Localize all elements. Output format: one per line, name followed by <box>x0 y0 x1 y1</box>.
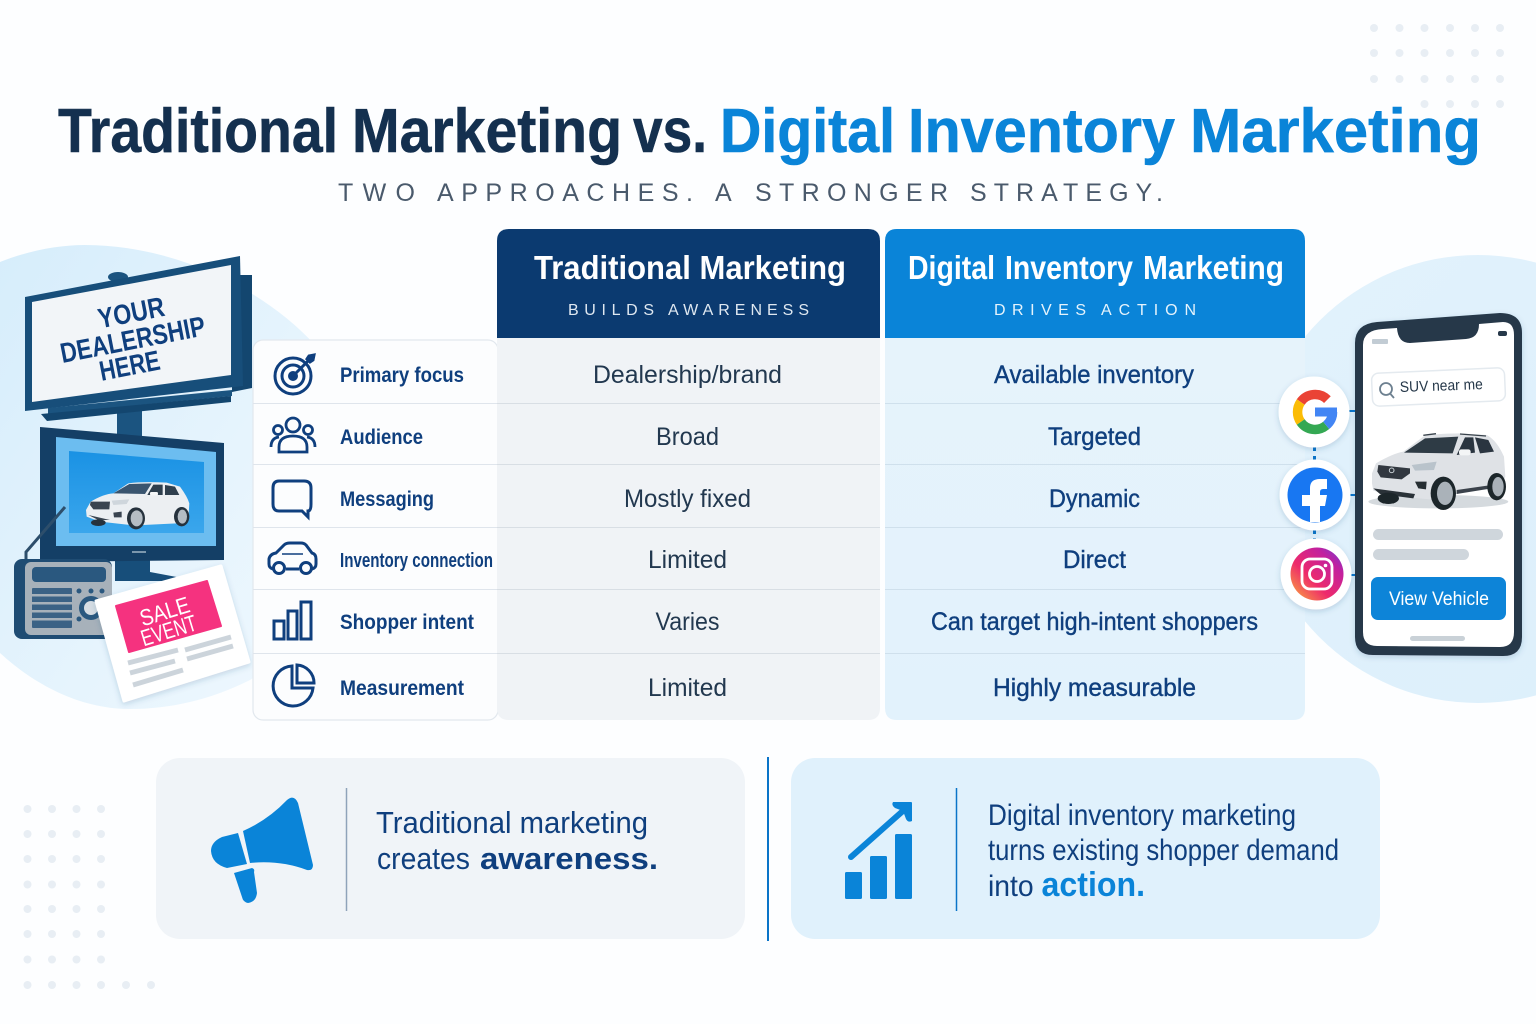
icon: growth chart <box>845 802 912 899</box>
digital column values: Direct <box>1063 546 1126 574</box>
column: digital inventory marketing: DRIVES <box>994 302 1086 319</box>
icon: Instagram <box>1280 538 1352 610</box>
table <box>253 229 1305 720</box>
sale event flyer: EVENT <box>138 610 200 651</box>
background blob: left illustration <box>0 245 315 709</box>
icon: Facebook <box>1280 460 1350 530</box>
billboard: HERE <box>97 345 163 387</box>
illustration: traditional media <box>14 256 252 701</box>
callout: traditional: creates <box>377 841 470 876</box>
SUV photo <box>1368 433 1508 510</box>
traditional column values: Dealership/brand <box>593 361 782 389</box>
panel: row labels <box>253 340 498 720</box>
radio <box>14 507 112 639</box>
subtitle: STRONGER <box>755 179 948 207</box>
callout: traditional <box>156 758 745 939</box>
dot pattern: top right <box>1370 24 1504 108</box>
label: inventory connection: Inventory connection <box>340 550 493 572</box>
billboard: DEALERSHIP <box>58 310 208 369</box>
callout: digital: turns existing shopper demand <box>988 834 1339 867</box>
icon: audience <box>271 418 315 452</box>
column: digital inventory marketing: Marketing <box>1143 249 1284 286</box>
traditional column values: Broad <box>656 423 719 451</box>
icon: bar chart <box>274 602 311 639</box>
column: traditional marketing: Traditional Marketing <box>534 249 846 286</box>
digital column values <box>931 361 1258 702</box>
title: Traditional <box>58 97 338 166</box>
background blob: right illustration <box>1254 255 1536 703</box>
view vehicle button <box>1371 577 1506 620</box>
search bar <box>1371 368 1506 406</box>
billboard <box>25 256 252 421</box>
divider between callouts <box>767 757 769 941</box>
callout: digital <box>791 758 1380 939</box>
column: traditional marketing: BUILDS <box>568 302 654 319</box>
content placeholder lines <box>1373 529 1503 560</box>
icon: Google <box>1278 376 1350 448</box>
callout: digital: into action. <box>988 866 1145 904</box>
title: Digital <box>720 97 895 166</box>
label: primary focus: Primary focus <box>340 364 464 387</box>
digital column values: Dynamic <box>1049 485 1140 513</box>
digital column values: Can target high-intent shoppers <box>931 608 1258 636</box>
column: digital inventory marketing: Inventory <box>1005 249 1134 286</box>
sale event flyer <box>96 566 249 701</box>
traditional column values: Limited <box>648 674 727 702</box>
connector dots <box>1313 410 1355 576</box>
label: measurement: Measurement <box>340 677 464 700</box>
column: traditional marketing: AWARENESS <box>668 302 809 319</box>
subtitle: TWO <box>338 179 415 207</box>
callout: traditional: awareness. <box>480 841 658 876</box>
label: messaging: Messaging <box>340 488 434 511</box>
column: traditional marketing <box>497 229 880 720</box>
billboard post <box>117 405 142 441</box>
television <box>40 427 224 581</box>
phone <box>1355 313 1522 656</box>
billboard: YOUR <box>95 291 167 334</box>
car on TV <box>86 482 189 529</box>
subtitle: STRATEGY. <box>970 179 1163 207</box>
label: audience: Audience <box>340 426 423 449</box>
icon: speech bubble <box>273 481 311 517</box>
title: vs. <box>633 97 707 166</box>
icon: pie chart <box>273 665 314 706</box>
icon: car <box>269 543 316 574</box>
digital column values: Targeted <box>1048 423 1141 451</box>
title <box>58 97 1481 166</box>
digital column values: Available inventory <box>994 361 1194 389</box>
column: digital inventory marketing: Digital <box>908 249 995 286</box>
traditional column values: Limited <box>648 546 727 574</box>
icon: target <box>275 355 314 394</box>
label: shopper intent: Shopper intent <box>340 611 474 634</box>
traditional column values: Varies <box>656 608 720 636</box>
callout: traditional: Traditional marketing <box>376 805 648 840</box>
illustration: phone and channels <box>1278 313 1522 656</box>
callout: digital: Digital inventory marketing <box>988 799 1296 832</box>
subtitle: A <box>715 179 732 207</box>
title: Marketing <box>1190 97 1481 166</box>
traditional column values: Mostly fixed <box>624 485 751 513</box>
search bar: SUV near me <box>1400 376 1483 396</box>
column: digital inventory marketing: ACTION <box>1101 302 1196 319</box>
title: Inventory <box>908 97 1175 166</box>
sale event flyer: SALE <box>136 591 193 631</box>
column: digital inventory marketing <box>885 229 1305 720</box>
digital column values: Highly measurable <box>993 674 1196 702</box>
traditional column values <box>593 361 782 702</box>
subtitle <box>338 179 1163 207</box>
title: Marketing <box>352 97 622 166</box>
view vehicle button: View Vehicle <box>1389 589 1489 610</box>
icon: megaphone <box>211 798 313 903</box>
subtitle: APPROACHES. <box>437 179 693 207</box>
dot pattern: bottom left <box>24 805 155 989</box>
